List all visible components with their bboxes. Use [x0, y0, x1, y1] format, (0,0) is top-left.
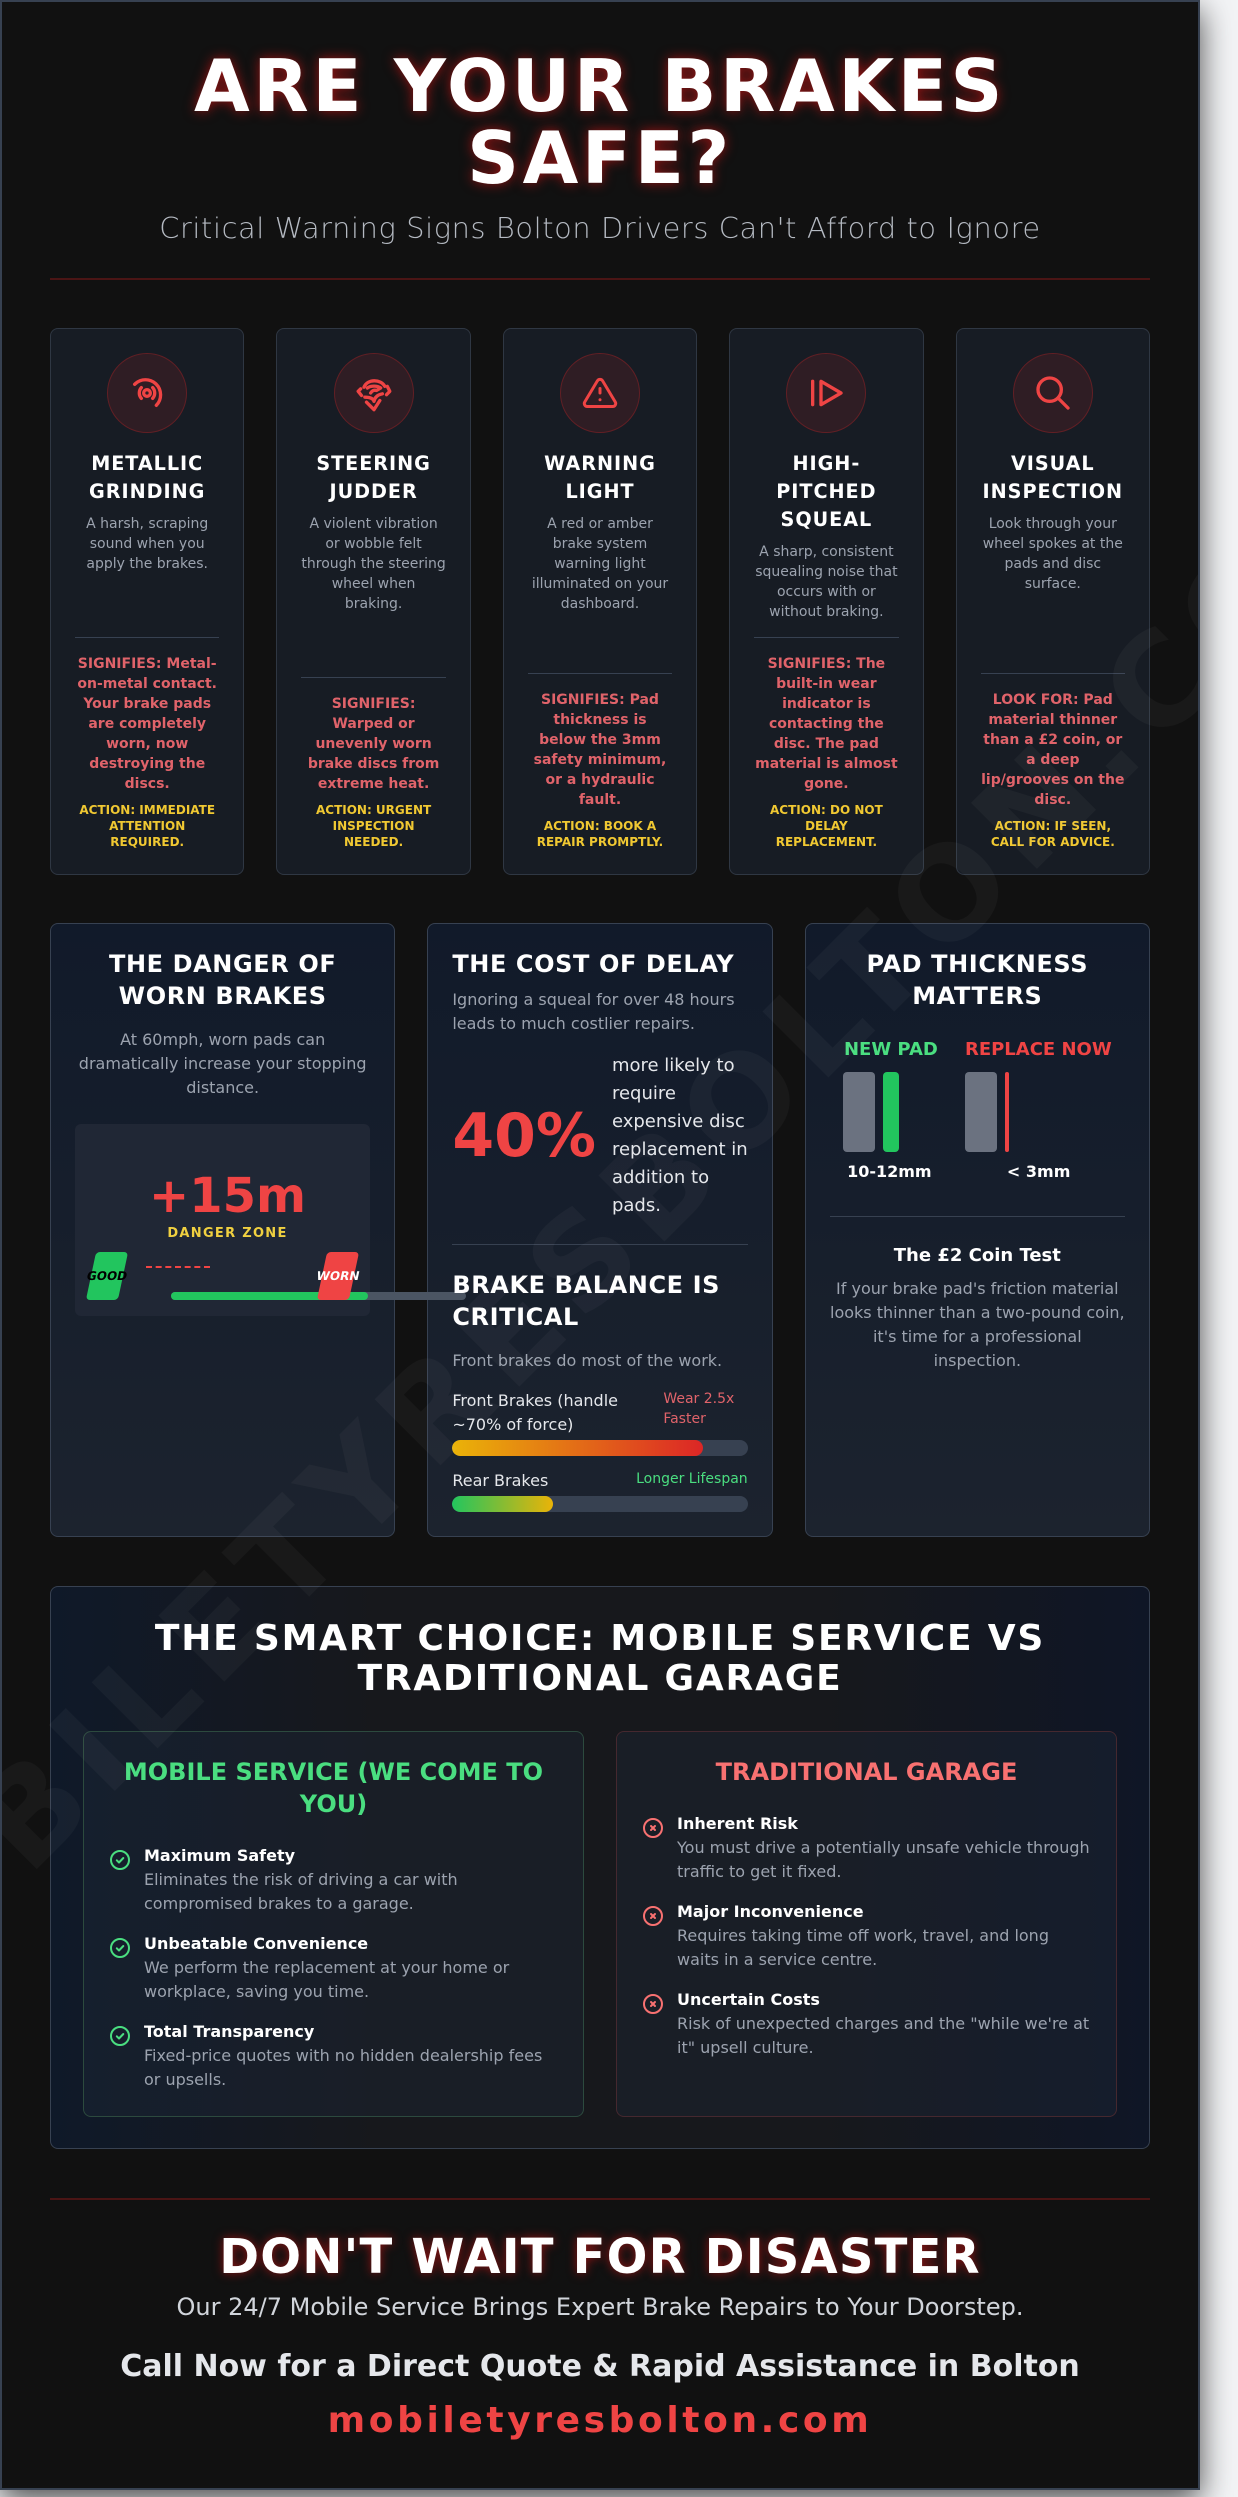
heading: [867, 950, 1088, 1010]
heading: warning light: WARNING: [544, 452, 656, 475]
signifies text: thickness is: [553, 712, 647, 728]
signifies and action: [301, 677, 446, 850]
bar: rear brakes: [452, 1496, 748, 1512]
title: [188, 44, 1006, 200]
heading: steering judder: JUDDER: [329, 480, 418, 503]
item: uncertain costs: [641, 1988, 1092, 2060]
bar: front brakes: [452, 1440, 748, 1456]
signifies text: extreme heat.: [318, 776, 429, 792]
worn pad thickness: < 3mm: [1007, 1162, 1070, 1181]
footer heading: DON'T WAIT FOR DISASTER: [219, 2229, 981, 2285]
description: dramatically increase your stopping: [79, 1054, 367, 1073]
item: maximum safety: compromised brakes to a garage.: [144, 1894, 414, 1913]
item: major inconvenience: Major Inconvenience: [677, 1902, 864, 1921]
item: inherent risk: traffic to get it fixed.: [677, 1862, 841, 1881]
stopping bar: [171, 1292, 466, 1300]
look for text: lip/grooves on the: [981, 772, 1124, 788]
signifies text: are completely: [88, 716, 206, 732]
label: rear lifespan: Longer Lifespan: [636, 1471, 748, 1487]
signifies and action: [75, 637, 219, 850]
action text: [316, 803, 432, 849]
signifies text: [308, 696, 439, 792]
action text: INSPECTION: [333, 819, 414, 833]
description: [79, 1030, 367, 1097]
danger zone label: DANGER ZONE: [167, 1226, 288, 1241]
coin test text: If your brake pad's friction material: [836, 1279, 1119, 1298]
heading: cost of delay: THE COST OF DELAY: [452, 950, 734, 978]
action text: ATTENTION: [109, 819, 185, 833]
stat: 40%: [452, 1055, 748, 1216]
signifies text: unevenly worn: [315, 736, 432, 752]
action text: [770, 803, 883, 849]
description: [452, 990, 735, 1033]
description: occurs with or: [777, 584, 876, 600]
item: unbeatable convenience: workplace, saving you time.: [144, 1982, 369, 2001]
action text: ACTION: IF SEEN,: [995, 819, 1111, 833]
look for text: disc.: [1034, 792, 1071, 808]
new pad: friction material: [883, 1072, 899, 1152]
heading: visual inspection: [983, 452, 1123, 503]
item: major inconvenience: waits in a service centre.: [677, 1950, 877, 1969]
description: [86, 516, 208, 572]
item: unbeatable convenience: We perform the replacement at your home or: [144, 1958, 509, 1977]
signifies text: fault.: [579, 792, 621, 808]
look for text: material thinner: [988, 712, 1117, 728]
signifies text: [77, 656, 217, 792]
signifies and action: [981, 673, 1125, 850]
worn pad: WORN: [315, 1269, 361, 1283]
item: uncertain costs: it" upsell culture.: [677, 2038, 814, 2057]
new pad: backing plate: [843, 1072, 875, 1152]
item: maximum safety: Maximum Safety: [144, 1846, 295, 1865]
stat text: pads.: [612, 1195, 661, 1216]
item: major inconvenience: [643, 1902, 1049, 1969]
description: [755, 544, 898, 620]
item: inherent risk: You must drive a potentially unsafe vehicle through: [677, 1838, 1090, 1857]
signifies text: material is almost: [755, 756, 898, 772]
signifies and action: [528, 673, 672, 850]
description: A red or amber: [547, 516, 653, 532]
signifies text: disc. The pad: [774, 736, 879, 752]
heading: warning light: LIGHT: [565, 480, 635, 503]
signifies text: built-in wear: [776, 676, 877, 692]
heading: THE SMART CHOICE: MOBILE SERVICE VS: [155, 1618, 1045, 1659]
subtitle: Critical Warning Signs Bolton Drivers Can't Afford to Ignore: [159, 211, 1041, 245]
action text: CALL FOR ADVICE.: [991, 835, 1115, 849]
label: front brakes: [452, 1391, 618, 1434]
signifies text: [755, 656, 898, 792]
action text: DELAY: [805, 819, 848, 833]
signifies text: destroying the: [89, 756, 205, 772]
icon: steering judder: [334, 353, 414, 433]
icon: squeal: [786, 353, 866, 433]
heading: brake balance: BRAKE BALANCE IS: [452, 1271, 720, 1299]
signifies text: [534, 692, 666, 808]
heading: high-pitched squeal: SQUEAL: [781, 508, 872, 531]
coin test text: inspection.: [934, 1351, 1021, 1370]
action text: REQUIRED.: [110, 835, 184, 849]
signifies text: worn, now: [106, 736, 188, 752]
list: mobile benefits: [110, 1846, 542, 2089]
title: SAFE?: [467, 116, 733, 200]
heading: warning light: [544, 452, 656, 503]
panel: pad thickness: [805, 923, 1150, 1537]
description: braking.: [345, 596, 402, 612]
description: or wobble felt: [325, 536, 422, 552]
label: front brakes: Front Brakes (handle: [452, 1391, 618, 1410]
heading: mobile service: MOBILE SERVICE (WE COME TO: [124, 1758, 543, 1786]
signifies text: SIGNIFIES: The: [768, 656, 885, 672]
heading: visual inspection: VISUAL: [1011, 452, 1095, 475]
description: wheel when: [332, 576, 415, 592]
stat text: expensive disc: [612, 1111, 745, 1132]
heading: high-pitched squeal: HIGH-: [792, 452, 860, 475]
icon: magnifier: [1013, 353, 1093, 433]
label: front brakes: ~70% of force): [452, 1415, 573, 1434]
stopping bar fill: [171, 1292, 368, 1300]
label: new pad: NEW PAD: [844, 1039, 938, 1060]
panel: high-pitched squeal: [729, 328, 924, 875]
description: leads to much costlier repairs.: [452, 1014, 695, 1033]
heading: high-pitched squeal: PITCHED: [776, 480, 876, 503]
item: maximum safety: Eliminates the risk of driving a car with: [144, 1870, 458, 1889]
stat text: replacement in: [612, 1139, 748, 1160]
signifies text: below the 3mm: [539, 732, 661, 748]
description: through the steering: [301, 556, 446, 572]
description: [983, 516, 1123, 592]
panel: warning light: [503, 328, 697, 875]
item: unbeatable convenience: [110, 1934, 510, 2001]
description: A violent vibration: [309, 516, 438, 532]
panel: mobile service: [83, 1731, 584, 2117]
heading: traditional garage: TRADITIONAL GARAGE: [716, 1758, 1017, 1786]
icon: warning triangle: [560, 353, 640, 433]
signifies text: Warped or: [332, 716, 415, 732]
worn pad: backing plate: [965, 1072, 997, 1152]
action text: [991, 819, 1115, 849]
label: rear brakes: Rear Brakes: [452, 1471, 548, 1490]
description: Look through your: [989, 516, 1117, 532]
coin test text: looks thinner than a two-pound coin,: [830, 1303, 1125, 1322]
panel: danger of worn brakes: [50, 923, 395, 1537]
label: front wear: Wear 2.5x: [663, 1391, 734, 1407]
signifies text: or a hydraulic: [545, 772, 655, 788]
description: illuminated on your: [532, 576, 668, 592]
heading: brake balance: [452, 1271, 720, 1331]
stat text: more likely to: [612, 1055, 735, 1076]
stat: +15m: +15m: [149, 1168, 306, 1224]
title: ARE YOUR BRAKES: [194, 44, 1006, 128]
panel: visual inspection: [956, 328, 1150, 875]
action text: [79, 803, 215, 849]
description: warning light: [554, 556, 646, 572]
panel: traditional garage: [616, 1731, 1117, 2117]
description: A harsh, scraping: [86, 516, 208, 532]
description: apply the brakes.: [86, 556, 208, 572]
list: garage drawbacks: [643, 1814, 1090, 2057]
heading: PAD THICKNESS: [867, 950, 1088, 978]
description: dashboard.: [561, 596, 639, 612]
worn pad: friction material: [1005, 1072, 1009, 1152]
description: surface.: [1025, 576, 1081, 592]
stat text: require: [612, 1083, 676, 1104]
item: uncertain costs: Risk of unexpected charges and the "while we're at: [677, 2014, 1089, 2033]
action text: ACTION: URGENT: [316, 803, 431, 817]
good pad: GOOD: [85, 1269, 128, 1283]
item: inherent risk: [643, 1814, 1090, 1881]
heading: metallic grinding: METALLIC: [91, 452, 203, 475]
panel: steering judder: [276, 328, 471, 875]
description: without braking.: [769, 604, 884, 620]
item: maximum safety: [110, 1846, 458, 1913]
label: front wear: Faster: [663, 1411, 706, 1427]
label: replace now: REPLACE NOW: [965, 1039, 1112, 1060]
coin test text: [830, 1279, 1125, 1370]
look for text: LOOK FOR: Pad: [993, 692, 1113, 708]
signifies text: safety minimum,: [534, 752, 666, 768]
signifies text: SIGNIFIES: Pad: [541, 692, 659, 708]
signifies text: SIGNIFIES:: [332, 696, 415, 712]
panel: mobile vs garage comparison: [50, 1586, 1150, 2149]
description: pads and disc: [1004, 556, 1101, 572]
panel: cost of delay and brake balance: [427, 923, 773, 1537]
item: unbeatable convenience: Unbeatable Convenience: [144, 1934, 368, 1953]
panel: metallic grinding: [50, 328, 244, 875]
footer subtext: Our 24/7 Mobile Service Brings Expert Brake Repairs to Your Doorstep.: [177, 2293, 1023, 2321]
look for text: [981, 692, 1124, 808]
signifies text: SIGNIFIES: Metal-: [78, 656, 217, 672]
heading: TRADITIONAL GARAGE: [358, 1658, 842, 1699]
heading: steering judder: STEERING: [316, 452, 431, 475]
item: total transparency: [110, 2022, 542, 2089]
signifies and action: [754, 637, 899, 850]
dashed distance line: [146, 1266, 210, 1268]
description: sound when you: [90, 536, 205, 552]
action text: REPAIR PROMPTLY.: [537, 835, 663, 849]
heading: MATTERS: [912, 982, 1042, 1010]
signifies text: discs.: [125, 776, 170, 792]
signifies text: indicator is: [782, 696, 871, 712]
description: [532, 516, 668, 612]
description: A sharp, consistent: [759, 544, 894, 560]
good pad: [86, 1252, 128, 1300]
call to action: Call Now for a Direct Quote & Rapid Assistance in Bolton: [120, 2348, 1080, 2384]
heading: mobile service: [124, 1758, 543, 1818]
description: brake system: [553, 536, 647, 552]
item: inherent risk: Inherent Risk: [677, 1814, 798, 1833]
description: [301, 516, 446, 612]
stat text: addition to: [612, 1167, 709, 1188]
website: mobiletyresbolton.com: [328, 2400, 872, 2440]
new pad thickness: 10-12mm: [847, 1162, 932, 1181]
signifies text: gone.: [804, 776, 849, 792]
heading: THE DANGER OF: [109, 950, 336, 978]
signifies text: brake discs from: [308, 756, 439, 772]
heading: mobile service: YOU): [300, 1790, 367, 1818]
description: wheel spokes at the: [983, 536, 1123, 552]
heading: metallic grinding: GRINDING: [89, 480, 205, 503]
item: major inconvenience: Requires taking time off work, travel, and long: [677, 1926, 1049, 1945]
description: Ignoring a squeal for over 48 hours: [452, 990, 735, 1009]
worn pad: [317, 1252, 359, 1300]
item: total transparency: or upsells.: [144, 2070, 226, 2089]
heading: visual inspection: INSPECTION: [983, 480, 1123, 503]
stopping distance diagram: [75, 1124, 370, 1316]
icon: grinding sound: [107, 353, 187, 433]
action text: ACTION: IMMEDIATE: [79, 803, 215, 817]
description: Front brakes do most of the work.: [452, 1351, 722, 1370]
description: At 60mph, worn pads can: [120, 1030, 325, 1049]
description: distance.: [186, 1078, 259, 1097]
coin test heading: The £2 Coin Test: [894, 1245, 1061, 1266]
heading: brake balance: CRITICAL: [452, 1303, 579, 1331]
heading: WORN BRAKES: [119, 982, 327, 1010]
signifies text: Your brake pads: [83, 696, 211, 712]
action text: ACTION: BOOK A: [544, 819, 656, 833]
action text: REPLACEMENT.: [776, 835, 877, 849]
item: total transparency: Fixed-price quotes with no hidden dealership fees: [144, 2046, 542, 2065]
stat number: 40%: [452, 1101, 596, 1171]
action text: ACTION: DO NOT: [770, 803, 883, 817]
coin test text: it's time for a professional: [873, 1327, 1082, 1346]
heading: [109, 950, 336, 1010]
signifies text: on-metal contact.: [77, 676, 217, 692]
heading: high-pitched squeal: [776, 452, 876, 531]
action text: NEEDED.: [344, 835, 403, 849]
item: uncertain costs: Uncertain Costs: [677, 1990, 820, 2009]
action text: [537, 819, 663, 849]
signifies text: contacting the: [769, 716, 884, 732]
heading: [155, 1618, 1045, 1699]
look for text: a deep: [1026, 752, 1079, 768]
look for text: than a £2 coin, or: [983, 732, 1122, 748]
heading: steering judder: [316, 452, 431, 503]
item: total transparency: Total Transparency: [144, 2022, 314, 2041]
label: front wear: [663, 1391, 734, 1427]
heading: metallic grinding: [89, 452, 205, 503]
description: squealing noise that: [755, 564, 898, 580]
stat text: [612, 1055, 748, 1216]
